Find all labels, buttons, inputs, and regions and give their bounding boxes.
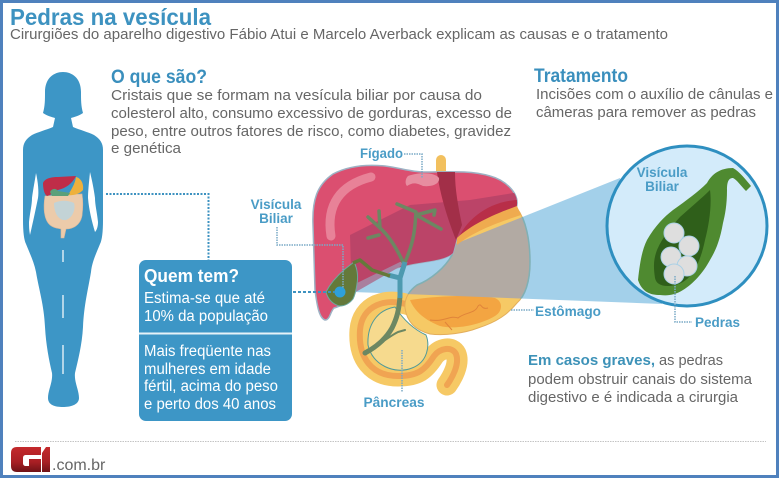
arm gap left xyxy=(29,173,38,235)
text block: O que são xyxy=(111,87,512,157)
text block: casos graves: digestivo e é indicada a cirurgia xyxy=(528,389,739,406)
text: estimate: 10% da população xyxy=(144,308,268,325)
title: Pedras na vesícula xyxy=(10,4,212,30)
leader: Pedras xyxy=(675,276,692,322)
liver highlights xyxy=(330,177,371,236)
stomach xyxy=(405,208,530,335)
mini stomach xyxy=(68,177,83,195)
subtitle: Cirurgiões do aparelho digestivo Fábio Atui e Marcelo Averback explicam as causas e o tratamento xyxy=(10,26,668,43)
liver xyxy=(313,165,517,320)
panel: Quem tem? xyxy=(139,260,292,421)
text block: O que são: e genética xyxy=(111,140,182,157)
text: profile: Mais freqüente nas xyxy=(144,343,271,360)
label: Estômago: Estômago xyxy=(535,304,601,319)
arm gap right xyxy=(88,172,98,232)
liver shading xyxy=(350,172,518,282)
zoom cone xyxy=(340,178,662,304)
text: profile xyxy=(144,343,278,413)
text block: Tratamento xyxy=(536,86,773,121)
mini intestine xyxy=(44,194,83,238)
label: Pâncreas: Pâncreas xyxy=(364,395,424,410)
text block: O que são: peso, entre outros fatores de risco, como diabetes, gravidez xyxy=(111,123,511,140)
dotted connector: body to box xyxy=(106,194,208,260)
leader: Vísicula Biliar xyxy=(277,227,343,288)
label: Visícula Biliar in circle: Biliar xyxy=(645,179,680,194)
label: Fígado: Fígado xyxy=(360,146,403,161)
text block: Tratamento: câmeras para remover as pedras xyxy=(536,104,756,121)
text block: casos graves: as pedras xyxy=(659,352,723,369)
stones xyxy=(661,223,699,284)
mini gallbladder xyxy=(50,189,70,196)
duodenum xyxy=(360,302,457,385)
G1 logo xyxy=(11,447,106,474)
text block: casos graves xyxy=(528,352,753,406)
mini liver xyxy=(43,176,76,196)
stomach overlap rim xyxy=(457,206,521,245)
text: profile: mulheres em idade xyxy=(144,361,271,378)
common duct in cone xyxy=(388,262,405,298)
gallbladder marker xyxy=(334,286,346,298)
stomach through cone xyxy=(408,216,531,299)
label: Vísicula Biliar: Biliar xyxy=(259,211,294,226)
heading: Quem tem?: Quem tem? xyxy=(144,265,239,286)
text block: casos graves: podem obstruir canais do sistema xyxy=(528,371,753,388)
mini intestine centre xyxy=(54,201,75,220)
leader: Pâncreas xyxy=(401,350,403,392)
text block: O que são: colesterol alto, consumo excessivo de gorduras, excesso de xyxy=(111,105,512,122)
label: Vísicula Biliar xyxy=(251,197,302,226)
leader: Estômago xyxy=(511,309,534,311)
leader: Fígado xyxy=(404,154,422,178)
text: estimate: Estima-se que até xyxy=(144,290,265,307)
text: profile: e perto dos 40 anos xyxy=(144,396,276,413)
text block: O que são: Cristais que se formam na vesícula biliar por causa do xyxy=(111,87,482,104)
label: Vísicula Biliar: Visícula xyxy=(251,197,302,212)
organ illustration xyxy=(313,160,530,385)
magnifier circle xyxy=(607,146,767,306)
gallbladder xyxy=(326,260,390,306)
stomach inner folds xyxy=(410,296,501,327)
footer divider xyxy=(15,440,766,442)
text block: Tratamento: Incisões com o auxílio de cânulas e xyxy=(536,86,773,103)
label: Visícula Biliar in circle: Visícula xyxy=(637,165,688,180)
text: estimate xyxy=(144,290,268,325)
label: Visícula Biliar in circle xyxy=(637,165,688,194)
leg gaps xyxy=(62,250,64,374)
gallbladder enlarged xyxy=(638,168,751,295)
heading: O que são?: O que são? xyxy=(111,67,207,88)
text block: casos graves: Em casos graves, xyxy=(528,352,655,369)
heading: Tratamento: Tratamento xyxy=(534,66,628,87)
gallbladder inner xyxy=(654,190,711,286)
label: Pedras: Pedras xyxy=(695,315,740,330)
logo text: .com.br xyxy=(52,457,106,474)
text: profile: fértil, acima do peso xyxy=(144,378,278,395)
pancreas head xyxy=(368,307,428,370)
dotted connector: box to gallbladder xyxy=(293,291,335,293)
bile duct tree xyxy=(365,204,441,353)
woman silhouette xyxy=(23,72,103,407)
esophagus xyxy=(436,160,446,180)
cone over liver band xyxy=(348,262,408,293)
